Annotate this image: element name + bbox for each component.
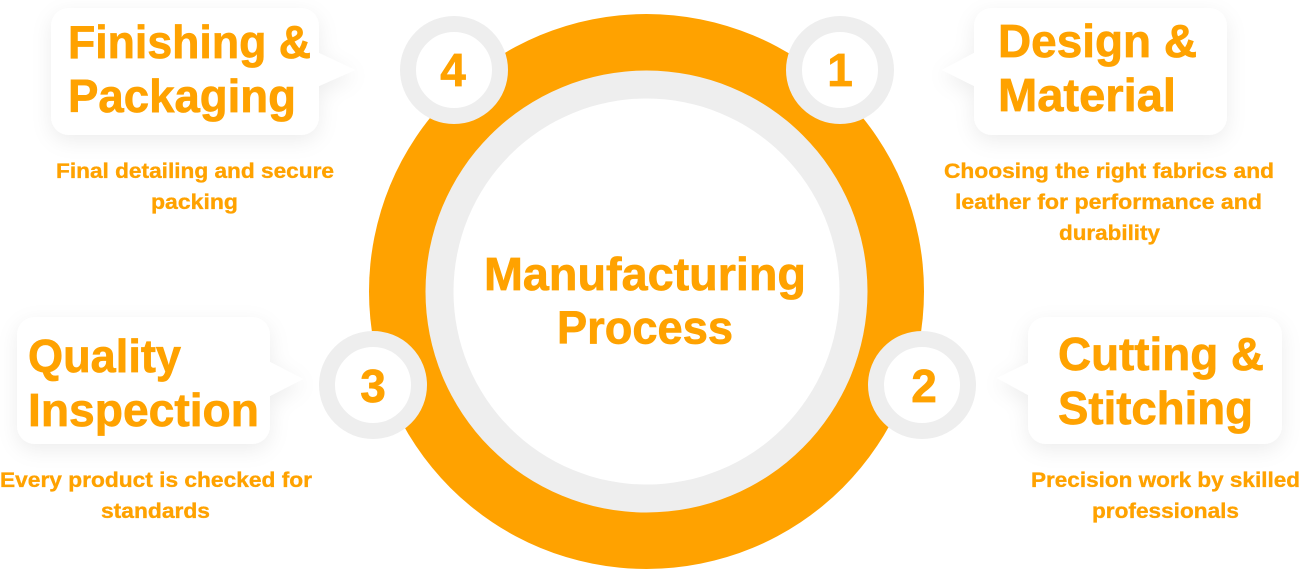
callout: finishing and packaging: Finishing &: [68, 16, 311, 68]
description: quality inspection: [0, 468, 313, 523]
description: design and material: leather for performance and: [955, 190, 1262, 214]
description: design and material: durability: [1059, 221, 1160, 245]
description: cutting and stitching: [1031, 468, 1300, 523]
description: finishing and packaging: Final detailing and secure: [56, 159, 334, 183]
callout: finishing and packaging: Packaging: [68, 70, 296, 122]
step 4 badge: [408, 24, 500, 116]
callout: quality inspection: Quality: [28, 330, 181, 382]
step 1 badge: [794, 24, 886, 116]
step 2 badge: [876, 339, 968, 431]
callout: quality inspection: Inspection: [28, 384, 259, 436]
center title: Process: [557, 302, 733, 354]
description: cutting and stitching: Precision work by skilled: [1031, 468, 1300, 492]
step 1 badge: 1: [827, 44, 853, 96]
description: finishing and packaging: [56, 159, 334, 214]
description: design and material: [944, 159, 1274, 245]
step 3 badge: 3: [360, 360, 386, 412]
step 2 badge: 2: [911, 360, 937, 412]
description: quality inspection: standards: [101, 499, 210, 523]
description: cutting and stitching: professionals: [1092, 499, 1239, 523]
callout: cutting and stitching: Stitching: [1058, 382, 1253, 434]
center title: Manufacturing: [484, 248, 806, 300]
callout: finishing and packaging: [51, 8, 355, 135]
callout: cutting and stitching: [997, 317, 1282, 444]
callout: cutting and stitching: Cutting &: [1058, 328, 1264, 380]
step 3 badge: [327, 339, 419, 431]
callout: design and material: [942, 8, 1227, 135]
center title: [484, 248, 806, 354]
step 4 badge: 4: [440, 44, 466, 96]
callout: design and material: Material: [998, 69, 1176, 121]
callout: design and material: Design &: [998, 15, 1197, 67]
description: finishing and packaging: packing: [151, 190, 238, 214]
central ring diagram: [369, 14, 924, 569]
callout: quality inspection: [17, 317, 303, 444]
description: design and material: Choosing the right fabrics and: [944, 159, 1274, 183]
description: quality inspection: Every product is checked for: [0, 468, 313, 492]
